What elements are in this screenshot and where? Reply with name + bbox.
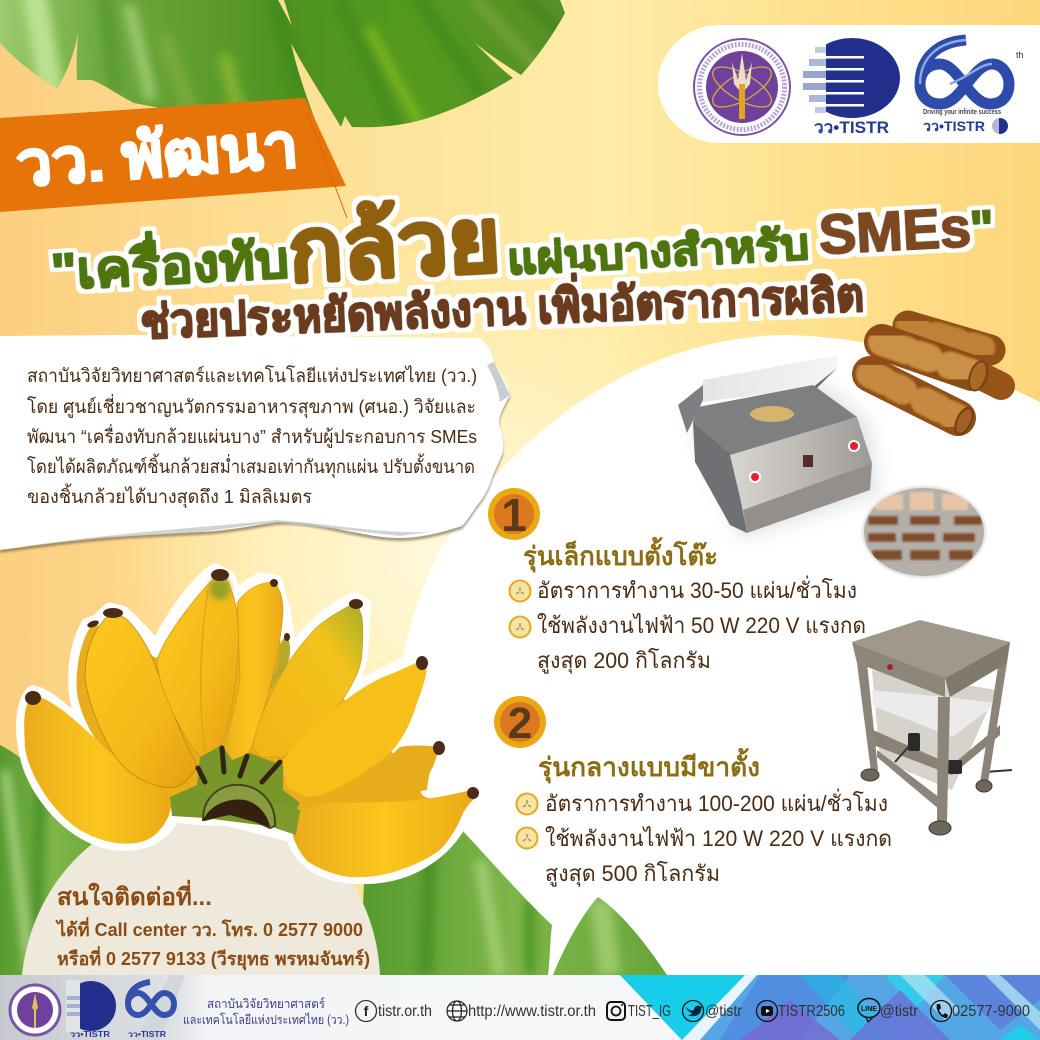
- title line 2: ช่วยประหยัดพลังงาน เพิ่มอัตราการผลิต: [139, 262, 865, 348]
- logo text: slogan: Driving your infinite success: [923, 107, 1001, 116]
- social: facebook: f: [364, 1003, 369, 1019]
- footer logo text: วว•TISTR: [128, 1030, 166, 1039]
- social: facebook: tistr.or.th: [378, 1003, 432, 1020]
- contact line 2: หรือที่ 0 2577 9133 (วีรยุทธ พรหมจันทร์): [57, 946, 370, 971]
- bullet icon: banana slice: [510, 616, 530, 638]
- social: instagram: TIST_IG: [628, 1003, 671, 1020]
- machine pedals and cable: [895, 733, 1012, 774]
- round banana sheet: [750, 406, 794, 422]
- banana back right: [290, 746, 440, 808]
- intro text: โดยได้ผลิตภัณฑ์ชิ้นกล้วยสม่ำเสมอเท่ากันทุกแผ่น ปรับตั้งขนาด: [27, 453, 475, 479]
- social: twitter: @tistr: [705, 1003, 742, 1020]
- illustration: banana bunch: [24, 569, 479, 877]
- machine wheels: [861, 769, 992, 835]
- machine lid: [703, 355, 838, 402]
- institute name: สถาบันวิจัยวิทยาศาสตร์: [207, 997, 325, 1011]
- machine buttons: [749, 440, 860, 483]
- banana upper right: [253, 602, 363, 757]
- footer bar: [0, 975, 1040, 1040]
- contact heading: สนใจติดต่อที่...: [57, 879, 212, 911]
- intro text: พัฒนา “เครื่องทับกล้วยแผ่นบาง” สำหรับผู้ประกอบการ SMEs: [27, 424, 477, 448]
- title: opening words: "เครื่องทับ: [49, 225, 290, 300]
- machine top surface: [693, 385, 857, 455]
- number 2: 2: [508, 699, 532, 748]
- bullet icon: banana slice: [516, 828, 538, 848]
- number 1: 1: [501, 489, 527, 541]
- banana silhouette with white outline: [24, 571, 478, 877]
- white curved panel: [360, 335, 1040, 975]
- heading: medium model: รุ่นกลางแบบมีขาตั้ง: [538, 747, 760, 784]
- photo: standing press machine: [852, 620, 1012, 835]
- banana stem fan: [170, 745, 300, 827]
- logo panel: [658, 25, 1040, 143]
- logo: seal: [694, 39, 790, 135]
- bullet icon: banana slice: [510, 580, 530, 602]
- banana dark tips: [25, 569, 479, 799]
- spec: medium model power: สูงสุด 500 กิโลกรัม: [545, 861, 720, 887]
- logo text: TISTR: วว•TISTR: [814, 118, 889, 137]
- machine side: [693, 422, 747, 533]
- banana back small: [262, 635, 290, 700]
- institute name: และเทคโนโลยีแห่งประเทศไทย (วว.): [183, 1012, 349, 1027]
- social: phone: [930, 1000, 1030, 1022]
- title: กล้วย: กล้วย: [286, 190, 503, 300]
- banana back left: [77, 623, 130, 757]
- spec: small model rate: อัตราการทำงาน 30-50 แผ่น/ชั่วโมง: [537, 575, 857, 603]
- bullet icon: banana slice: [516, 794, 538, 814]
- footer logo: seal: [10, 985, 60, 1035]
- title: SMEs: SMEs: [817, 195, 972, 266]
- logo text: TISTR small: วว•TISTR: [923, 118, 985, 134]
- contact panel background: [22, 800, 380, 975]
- contact text: [55, 879, 370, 971]
- spec: small model power: [537, 613, 866, 674]
- spec: small model power: สูงสุด 200 กิโลกรัม: [537, 648, 711, 674]
- machine front panel: [730, 417, 872, 510]
- institute name: [183, 997, 349, 1027]
- machine legs: [857, 663, 1007, 823]
- intro text: โดย ศูนย์เชี่ยวชาญนวัตกรรมอาหารสุขภาพ (ศนอ.) วิจัยและ: [27, 394, 476, 419]
- heading: small model: รุ่นเล็กแบบตั้งโต๊ะ: [523, 536, 718, 573]
- machine tabletop: [852, 620, 1010, 678]
- social: line: @tistr: [880, 1003, 918, 1020]
- banana leaf: lower right: [360, 825, 670, 975]
- social: youtube: [756, 1000, 845, 1022]
- spec: medium model power: ใช้พลังงานไฟฟ้า 120 W 220 V แรงกด: [545, 826, 892, 851]
- title: middle words: แผ่นบางสำหรับ: [506, 220, 810, 283]
- spec: medium model power: [545, 826, 892, 887]
- orange banner: [0, 98, 347, 218]
- photo: pressed banana sheets: [860, 485, 990, 580]
- social: line: LINE: [861, 1006, 877, 1013]
- social: phone: 02577-9000: [952, 1003, 1030, 1020]
- footer geometric pattern: [620, 975, 1040, 1040]
- logo: 60th: [920, 40, 1024, 134]
- intro text: ของชิ้นกล้วยได้บางสุดถึง 1 มิลลิเมตร: [27, 483, 312, 509]
- machine white plate: [872, 690, 998, 737]
- social: instagram: [607, 1002, 671, 1020]
- logo mark small: [990, 118, 1008, 134]
- contact line 1: ได้ที่ Call center วว. โทร. 0 2577 9000: [55, 917, 363, 940]
- banana right: [283, 660, 427, 797]
- banana behind center: [222, 582, 283, 760]
- spec: medium model rate: อัตราการทำงาน 100-200 แผ่น/ชั่วโมง: [545, 788, 888, 816]
- logo text: 60th: th: [1016, 50, 1024, 60]
- banana second left: [85, 613, 196, 787]
- social: facebook: [356, 1000, 432, 1022]
- social: website: http://www.tistr.or.th: [468, 1003, 596, 1020]
- logo: TISTR: [800, 30, 900, 137]
- number badge 1: [488, 488, 540, 541]
- photo: rolled banana snacks: [870, 326, 1001, 437]
- spec: small model power: ใช้พลังงานไฟฟ้า 50 W 220 V แรงกด: [537, 613, 866, 638]
- banana center: [157, 573, 238, 757]
- footer logo: 60th: [128, 982, 174, 1039]
- social: youtube: TISTR2506: [778, 1003, 845, 1020]
- panel: torn paper intro: [0, 335, 510, 553]
- intro text: [27, 365, 477, 509]
- social: line: [858, 998, 918, 1022]
- title: closing quote: ": [969, 200, 995, 257]
- banner text: วว. พัฒนา: [14, 111, 300, 200]
- number badge 2: [494, 696, 546, 748]
- social: twitter: [682, 1000, 742, 1022]
- banana front right: [293, 790, 477, 877]
- photo: tabletop press machine: [678, 355, 880, 540]
- banana lower left: [24, 697, 172, 844]
- banana leaf: top: [0, 0, 570, 135]
- title line 1: [49, 190, 995, 300]
- intro text: สถาบันวิจัยวิทยาศาสตร์และเทคโนโลยีแห่งประเทศไทย (วว.): [27, 365, 477, 386]
- banana leaf: lower left: [0, 745, 92, 975]
- footer logo text: วว•TISTR: [70, 1030, 110, 1039]
- machine back panel: [872, 670, 997, 790]
- footer logo: TISTR: [66, 980, 116, 1039]
- banana crown: [203, 785, 275, 828]
